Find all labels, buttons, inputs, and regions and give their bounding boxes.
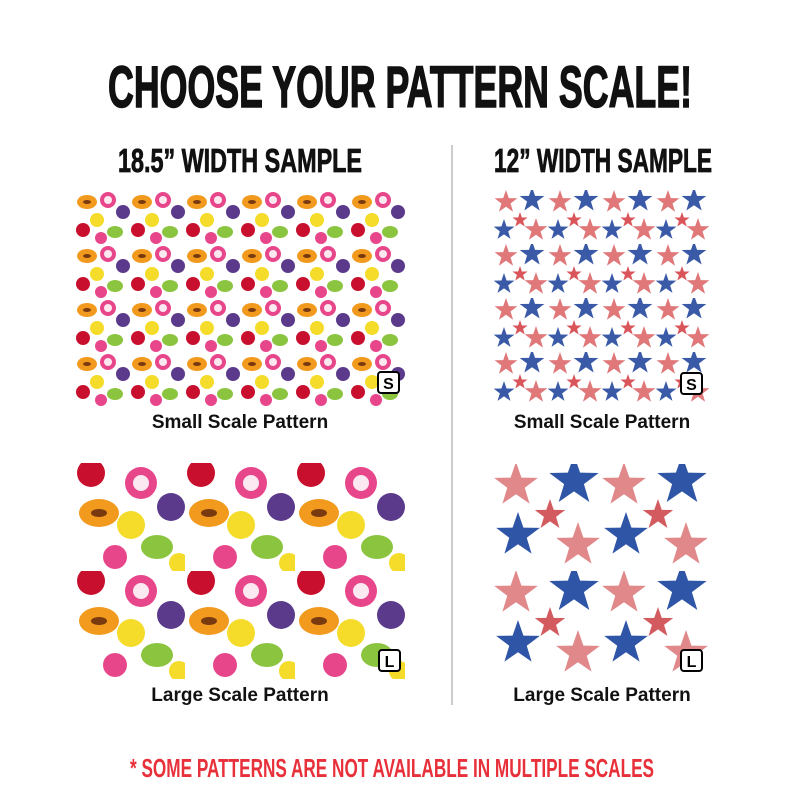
panel: fruit small	[75, 190, 405, 406]
badge S	[378, 372, 399, 393]
badge S: S	[383, 376, 394, 393]
panel: stars large	[494, 464, 710, 679]
label fruit small: Small Scale Pattern	[152, 412, 328, 433]
badge L	[681, 650, 702, 671]
panel: stars small	[494, 190, 710, 406]
label stars small: Small Scale Pattern	[514, 412, 690, 433]
badge L	[379, 650, 400, 671]
label fruit large: Large Scale Pattern	[151, 685, 329, 706]
panel: fruit large	[75, 463, 405, 679]
heading: 18.5 width: 18.5” WIDTH SAMPLE	[118, 142, 362, 179]
badge L: L	[687, 654, 697, 671]
badge S	[681, 373, 702, 394]
badge L: L	[385, 654, 395, 671]
label stars large: Large Scale Pattern	[513, 685, 691, 706]
badge S: S	[686, 377, 697, 394]
